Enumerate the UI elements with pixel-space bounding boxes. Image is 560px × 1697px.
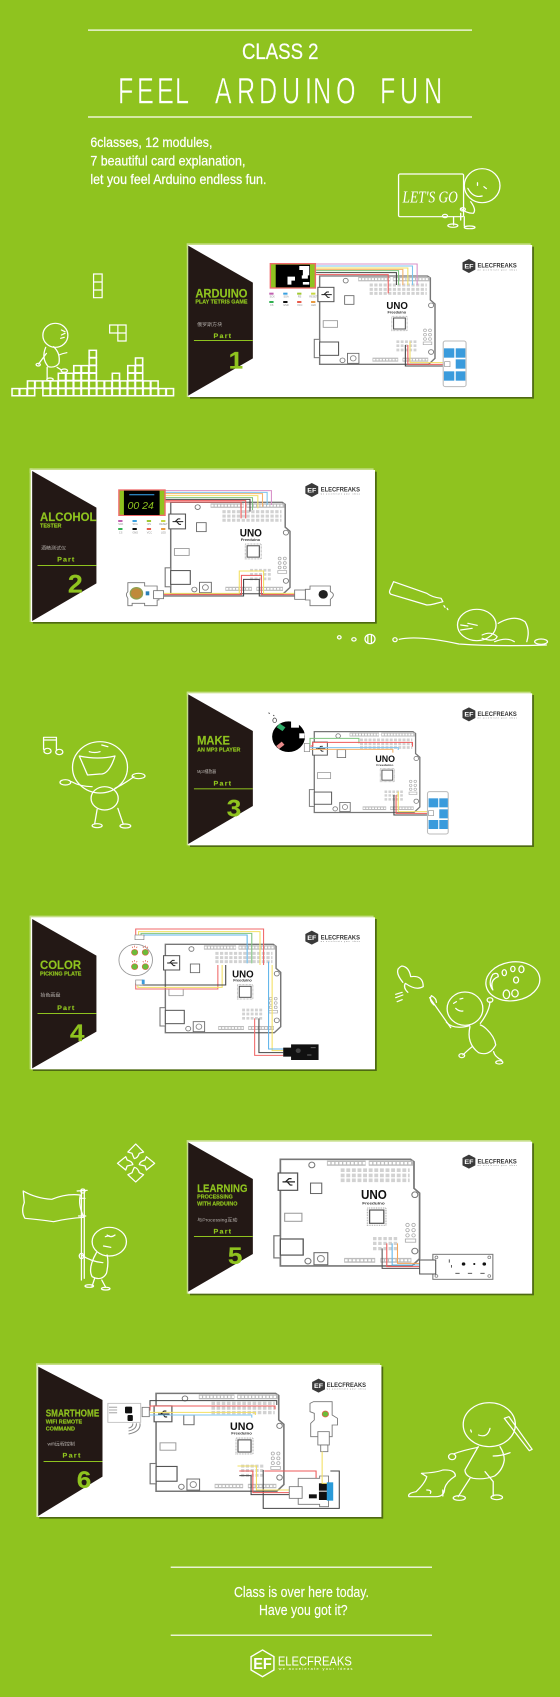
wiring diagram: uno with display and sensors: VCC	[147, 531, 152, 534]
wiring diagram: uno with display and keypad: RESET	[309, 296, 318, 299]
wiring diagram: uno with led ring and wireless module: UNO	[232, 969, 254, 980]
wiring diagram: uno with led ring and wireless module	[119, 929, 319, 1060]
panel 4 heading	[37, 958, 96, 1047]
panel 1 heading: 1	[229, 347, 243, 374]
panel 2 heading	[37, 510, 97, 598]
wiring diagram: uno with sensor module	[274, 1159, 493, 1279]
intro text	[90, 134, 266, 187]
logo: elecfreaks: we accelerate your ideas	[477, 268, 517, 271]
panel 5 heading: 5	[228, 1243, 242, 1270]
title: feel arduino fun: FEEL ARDUINO FUN	[118, 70, 442, 112]
panel 6 heading: Part	[62, 1453, 81, 1460]
panel 5 heading: 与Processing互动	[197, 1217, 238, 1224]
wiring diagram: uno with speaker and keypad: Freeduino	[376, 763, 393, 767]
panel 1 heading: PLAY TETRIS GAME	[195, 299, 248, 305]
panel 1 heading: Part	[214, 333, 232, 340]
wiring diagram: uno with display and sensors: 00 24	[127, 501, 154, 512]
wiring diagram: uno with speaker and keypad	[269, 713, 448, 834]
wiring diagram: uno with display and sensors: CS	[119, 531, 123, 534]
logo: elecfreaks: ELECFREAKS	[321, 935, 361, 941]
panel: part 4 color picking plate	[30, 916, 377, 1071]
panel 3 heading: 3	[227, 795, 241, 822]
logo: elecfreaks: we accelerate your ideas	[321, 492, 360, 495]
logo: elecfreaks: we accelerate your ideas	[327, 1388, 366, 1391]
panel 2 heading: TESTER	[40, 524, 62, 530]
wiring diagram: uno with speaker and keypad: UNO	[375, 754, 395, 765]
panel: part 1 arduino tetris	[187, 243, 534, 399]
wiring diagram: uno with display and sensors: RESET	[159, 523, 168, 526]
logo: elecfreaks: ELECFREAKS	[477, 1159, 517, 1165]
panel: part 5 learning processing	[187, 1140, 534, 1295]
logo: elecfreaks: EF	[307, 935, 316, 942]
illustration: painter figure with butterfly and palette	[396, 958, 543, 1064]
logo: elecfreaks	[305, 483, 361, 497]
logo: elecfreaks: we accelerate your ideas	[321, 940, 360, 943]
wiring diagram: uno with display and keypad: SDA	[284, 296, 289, 299]
panel 4 heading: 拾色画盘	[40, 992, 61, 999]
wiring diagram: uno with display and sensors: SDA	[132, 523, 138, 526]
illustration: tetris blocks and figure	[12, 274, 174, 396]
panel 2 heading: Part	[57, 557, 75, 564]
illustration: flag-bearing figure and arrows icon	[23, 1144, 155, 1290]
logo: elecfreaks	[462, 259, 517, 273]
panel 5 heading: WITH ARDUINO	[197, 1202, 238, 1208]
panel 1 heading: ARDUINO	[195, 287, 248, 300]
wiring diagram: uno with display and sensors: LED	[161, 531, 166, 534]
panel 6 heading: SMARTHOME	[46, 1409, 99, 1419]
logo: elecfreaks: ELECFREAKS	[327, 1382, 367, 1389]
illustration: figure holding let's go sign: LET'S GO	[402, 187, 458, 206]
logo: elecfreaks	[305, 931, 361, 945]
panel 3 heading: AN MP3 PLAYER	[197, 747, 241, 753]
panel 3 heading: Part	[214, 781, 232, 788]
panel 4 heading: Part	[57, 1005, 75, 1012]
header: title block	[88, 30, 472, 118]
intro text: 6classes, 12 modules,	[90, 134, 212, 150]
wiring diagram: uno with display and keypad: LED	[311, 304, 316, 307]
panel 1 heading: 俄罗斯方块	[197, 321, 222, 328]
panel 1 heading	[194, 287, 253, 374]
panel 6 heading: 6	[77, 1467, 91, 1494]
footer logo: elecfreaks: ELECFREAKS	[278, 1654, 352, 1669]
panel 6 heading: wifi远程控制	[47, 1441, 75, 1448]
wiring diagram: uno with display and sensors: RS	[147, 523, 151, 526]
closing message: Have you got it?	[259, 1602, 348, 1619]
panel 6 heading: WIFI REMOTE	[46, 1419, 82, 1425]
wiring diagram: uno with display and keypad: CS	[270, 304, 274, 307]
wiring diagram: uno with display and keypad: Freeduino	[387, 310, 406, 314]
wiring diagram: uno with wifi and relay	[108, 1393, 339, 1508]
panel 4 heading: COLOR	[40, 958, 81, 972]
logo: elecfreaks	[462, 707, 517, 721]
wiring diagram: uno with display and sensors: SCK	[118, 523, 124, 526]
panel 4 heading: PICKING PLATE	[40, 971, 82, 977]
logo: elecfreaks: EF	[307, 488, 316, 494]
logo: elecfreaks: ELECFREAKS	[477, 263, 517, 270]
wiring diagram: uno with display and keypad: UNO	[386, 300, 408, 312]
panel 4 heading: 4	[70, 1020, 85, 1047]
panel 5 heading: Part	[214, 1229, 232, 1235]
wiring diagram: uno with display and keypad: SCK	[270, 296, 275, 299]
illustration: singing figure with music notes	[44, 737, 145, 828]
closing message	[171, 1567, 432, 1636]
intro text: 7 beautiful card explanation,	[90, 152, 245, 168]
panel 5 heading	[194, 1182, 253, 1270]
panel: part 6 smarthome wifi	[36, 1363, 383, 1519]
logo: elecfreaks: ELECFREAKS	[321, 487, 361, 494]
panel 6 heading: COMMAND	[46, 1426, 75, 1432]
icon: four arrows	[117, 1144, 155, 1182]
wiring diagram: uno with display and sensors: Freeduino	[241, 538, 261, 542]
panel: part 2 alcohol tester	[30, 468, 377, 624]
footer logo: elecfreaks: EF	[253, 1656, 272, 1673]
logo: elecfreaks: EF	[464, 1159, 473, 1166]
intro text: let you feel Arduino endless fun.	[90, 171, 266, 187]
logo: elecfreaks: EF	[464, 712, 473, 719]
panel 2 heading: 2	[68, 571, 83, 598]
panel 5 heading: PROCESSING	[197, 1195, 233, 1201]
wiring diagram: uno with display and keypad: VCC	[297, 304, 303, 307]
panel: part 3 mp3 player	[187, 692, 534, 847]
wiring diagram: uno with wifi and relay: Freeduino	[231, 1432, 253, 1436]
logo: elecfreaks: EF	[314, 1383, 323, 1390]
logo: elecfreaks	[312, 1379, 367, 1393]
wiring diagram: uno with display and keypad: GND	[283, 304, 289, 307]
panel 3 heading: Mp3播放器	[197, 768, 216, 775]
panel 6 heading	[44, 1409, 102, 1494]
closing message: Class is over here today.	[234, 1584, 369, 1601]
panel 5 heading: LEARNING	[197, 1182, 247, 1195]
footer logo: elecfreaks	[251, 1650, 353, 1677]
wiring diagram: uno with display and sensors: GND	[132, 531, 138, 534]
wiring diagram: uno with display and sensors	[118, 490, 333, 606]
logo: elecfreaks: we accelerate your ideas	[477, 1164, 517, 1167]
logo: elecfreaks: ELECFREAKS	[477, 711, 517, 718]
logo: elecfreaks: we accelerate your ideas	[477, 717, 517, 720]
panel 3 heading: MAKE	[197, 734, 230, 748]
illustration: drunk figure with bottle	[337, 582, 547, 646]
wiring diagram: uno with wifi and relay: UNO	[230, 1419, 254, 1433]
wiring diagram: uno with display and keypad	[269, 264, 466, 387]
illustration: figure holding let's go sign	[399, 169, 500, 229]
panel 2 heading: 酒精测试仪	[41, 545, 66, 551]
panel 2 heading: ALCOHOL	[40, 510, 97, 524]
wiring diagram: uno with display and keypad: RS	[298, 296, 302, 299]
wiring diagram: uno with sensor module: Freeduino	[362, 1201, 385, 1205]
logo: elecfreaks	[462, 1155, 517, 1169]
title: class number: CLASS 2	[242, 39, 318, 64]
illustration: figure with brush and dog	[409, 1403, 532, 1500]
wiring diagram: uno with led ring and wireless module: Freeduino	[233, 979, 252, 983]
footer logo: elecfreaks: we accelerate your ideas	[279, 1667, 353, 1671]
panel 3 heading	[194, 734, 253, 822]
wiring diagram: uno with sensor module: UNO	[361, 1188, 387, 1202]
logo: elecfreaks: EF	[464, 264, 473, 270]
wiring diagram: uno with display and sensors: UNO	[240, 528, 262, 539]
